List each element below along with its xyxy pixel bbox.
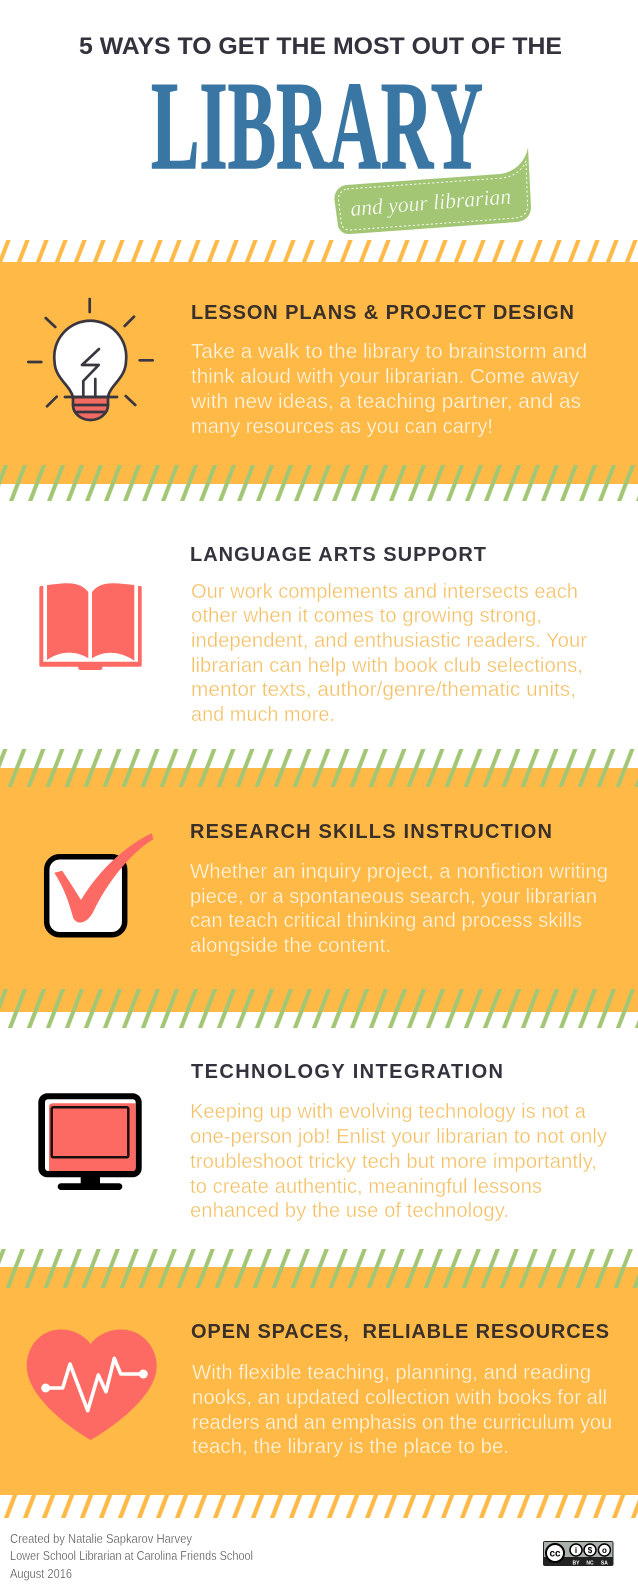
body text: one-person job! Enlist your librarian to not only [190, 1126, 607, 1148]
footer credits [10, 1531, 253, 1581]
body text: with new ideas, a teaching partner, and as [190, 391, 581, 413]
panel: lesson plans [0, 262, 638, 484]
body text: teach, the library is the place to be. [192, 1436, 509, 1458]
footer credits: August 2016 [10, 1566, 72, 1581]
green ribbon tag [334, 147, 531, 234]
body text [192, 1362, 612, 1458]
icon: monitor [38, 1093, 142, 1190]
heading: OPEN SPACES, RELIABLE RESOURCES [191, 1321, 609, 1343]
body text: Take a walk to the library to brainstorm and [191, 341, 587, 363]
creative commons badge: BY [573, 1560, 580, 1566]
heading: LANGUAGE ARTS SUPPORT [190, 544, 486, 566]
body text: independent, and enthusiastic readers. Your [191, 630, 587, 652]
body text: readers and an emphasis on the curriculum you [192, 1412, 612, 1434]
body text [190, 341, 587, 438]
body text: Whether an inquiry project, a nonfiction writing [190, 861, 608, 883]
panel: research skills [0, 768, 638, 1012]
heading: 5 ways: 5 WAYS TO GET THE MOST OUT OF THE [79, 33, 562, 60]
body text: troubleshoot tricky tech but more importantly, [190, 1151, 597, 1173]
icon: open book [39, 583, 142, 670]
ribbon text: and your librarian [349, 183, 512, 221]
footer credits: Lower School Librarian at Carolina Friends School [10, 1548, 253, 1563]
body text: and much more. [191, 704, 335, 726]
body text: nooks, an updated collection with books for all [192, 1387, 607, 1409]
body text: many resources as you can carry! [191, 416, 493, 438]
panel: technology [0, 1012, 638, 1267]
footer credits: Created by Natalie Sapkarov Harvey [10, 1531, 192, 1546]
creative commons badge: o [602, 1546, 607, 1555]
heading: TECHNOLOGY INTEGRATION [191, 1061, 503, 1083]
body text [191, 581, 587, 726]
creative commons badge: $ [588, 1546, 593, 1555]
heading: RESEARCH SKILLS INSTRUCTION [190, 821, 552, 843]
panel: open spaces [0, 1267, 638, 1495]
icon: heart with pulse [27, 1329, 157, 1440]
body text: mentor texts, author/genre/thematic units, [191, 679, 576, 701]
creative commons badge: SA [601, 1560, 608, 1566]
title [79, 33, 562, 196]
body text: piece, or a spontaneous search, your librarian [190, 886, 597, 908]
creative commons badge: NC [586, 1560, 594, 1566]
panel: language arts [0, 484, 638, 768]
heading: LESSON PLANS & PROJECT DESIGN [191, 302, 574, 324]
body text: can teach critical thinking and process skills [190, 910, 582, 932]
creative commons badge [543, 1541, 614, 1566]
body text: librarian can help with book club selections, [191, 655, 583, 677]
body text: enhanced by the use of technology. [190, 1200, 509, 1222]
body text: With flexible teaching, planning, and reading [192, 1362, 591, 1384]
body text: to create authentic, meaningful lessons [190, 1176, 542, 1198]
body text [190, 1101, 607, 1222]
body text: Our work complements and intersects each [191, 581, 578, 603]
body text: alongside the content. [190, 935, 391, 957]
body text [190, 861, 608, 957]
icon: checkbox [47, 833, 153, 935]
icon: light bulb [28, 299, 153, 420]
creative commons badge: i [575, 1546, 577, 1555]
creative commons badge: cc [549, 1548, 561, 1560]
body text: other when it comes to growing strong, [191, 605, 542, 627]
body text: think aloud with your librarian. Come away [191, 366, 579, 388]
body text: Keeping up with evolving technology is not a [190, 1101, 587, 1123]
